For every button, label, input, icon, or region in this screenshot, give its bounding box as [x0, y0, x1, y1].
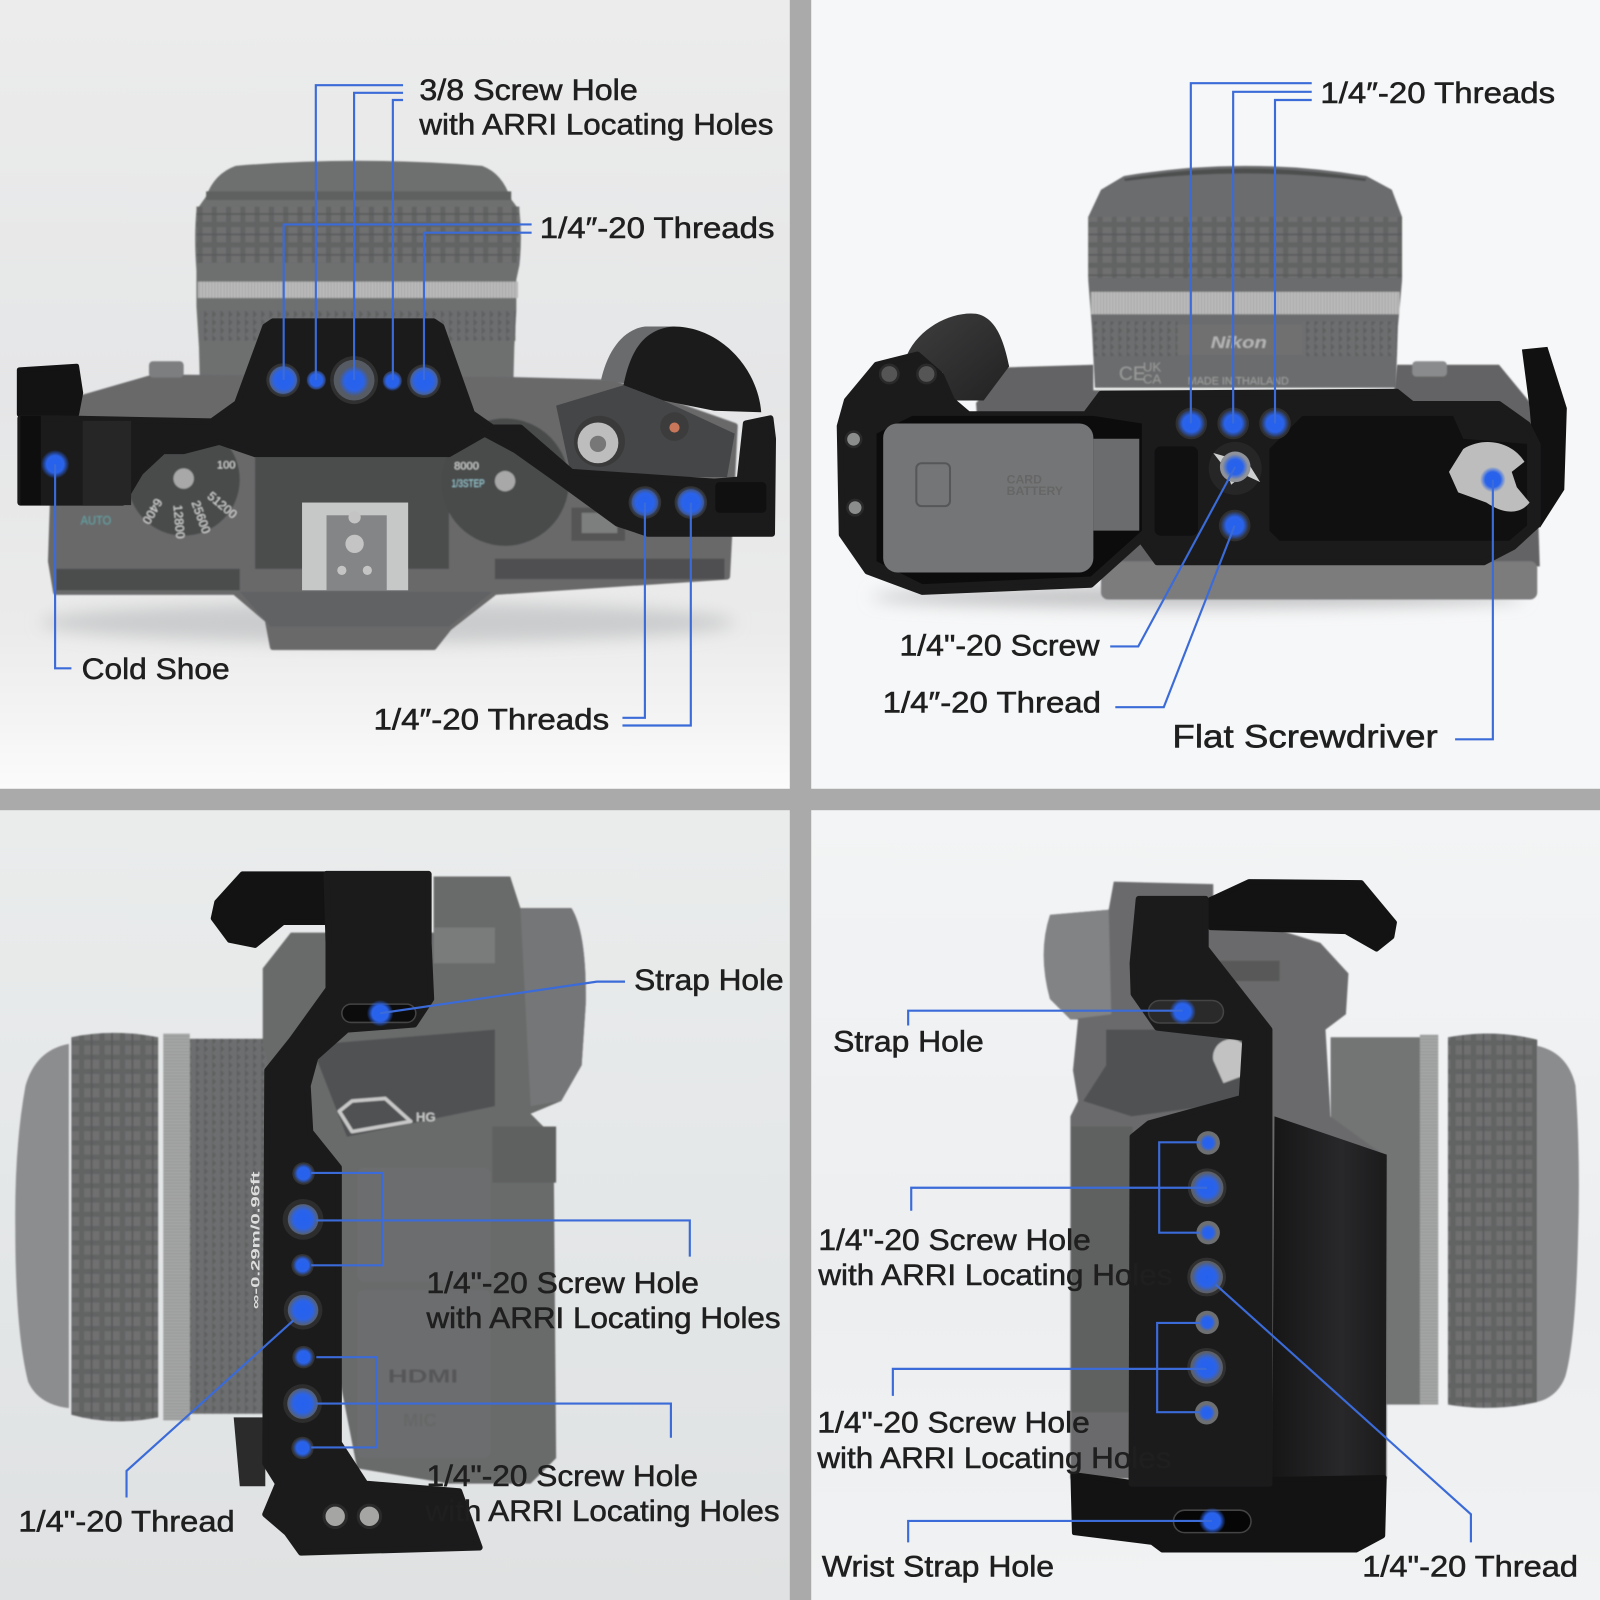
faded camera: lens: Nikon: [1211, 334, 1267, 352]
faded camera: body: 25600: [189, 499, 213, 536]
faded camera: body: 8000: [454, 460, 479, 472]
labels: Strap Hole: [833, 1026, 984, 1059]
cage: side plate: [1132, 899, 1269, 1484]
panel: top view: [0, 0, 790, 789]
cage: base: [1073, 1474, 1384, 1550]
labels: [816, 1026, 1578, 1584]
faded camera: body: 100: [217, 459, 236, 471]
cage: thumb rest: [213, 874, 327, 945]
labels: Cold Shoe: [82, 653, 230, 686]
camera shadow: [41, 602, 735, 643]
labels: 1/4"-20 Screw Hole: [818, 1224, 1091, 1257]
battery door: [883, 423, 1139, 572]
labels: Flat Screwdriver: [1172, 717, 1438, 754]
cage: base plate: [840, 355, 1538, 592]
labels: 1/4″-20 Thread: [883, 687, 1101, 720]
panel background: [0, 0, 790, 789]
faded camera: lens: [1088, 166, 1402, 388]
holes and markers: [1169, 998, 1227, 1534]
callout lines: [55, 85, 691, 726]
panel background: [0, 810, 790, 1600]
faded camera: body: [1044, 882, 1387, 1479]
faded camera: body: 51200: [205, 489, 240, 522]
faded camera: hot shoe: [302, 503, 408, 590]
faded camera: body: [263, 877, 586, 1484]
cage: hand grip: [907, 313, 1009, 401]
labels: 1/4"-20 Screw Hole: [427, 1460, 698, 1493]
faded camera: lens: [1331, 1033, 1579, 1408]
faded camera: lens: [15, 1033, 271, 1421]
cage: thumb rest: [1211, 882, 1394, 949]
labels: 1/4″-20 Threads: [1320, 77, 1555, 110]
labels: [82, 74, 774, 737]
callout lines: [893, 1011, 1471, 1542]
holes and markers: [1176, 408, 1506, 541]
cage: side plate: [265, 874, 480, 1553]
holes and markers: [283, 1000, 393, 1459]
labels: with ARRI Locating Holes: [816, 1442, 1171, 1475]
labels: 1/4"-20 Thread: [1362, 1551, 1578, 1584]
panel background: [811, 810, 1600, 1600]
labels: 1/4"-20 Screw: [899, 630, 1100, 663]
labels: 1/4"-20 Thread: [18, 1506, 235, 1539]
cage: top plate: [20, 321, 773, 534]
faded camera: body: [976, 361, 1540, 599]
callout lines: [1110, 83, 1493, 739]
holes and markers: [41, 356, 707, 519]
camera shadow: [871, 587, 1524, 607]
labels: 1/4"-20 Screw Hole: [427, 1267, 699, 1300]
strap holes: [1148, 1001, 1251, 1533]
faded camera: lens: CE: [1119, 363, 1146, 385]
screws: [846, 365, 936, 515]
faded camera: body: HDMI: [388, 1366, 458, 1387]
labels: with ARRI Locating Holes: [418, 109, 773, 142]
labels: Strap Hole: [634, 964, 784, 997]
lens bottom mount: [234, 1417, 265, 1486]
labels: 1/4″-20 Threads: [540, 212, 774, 245]
cage: hand grip: [1272, 1116, 1387, 1486]
cage: right shoe: [1522, 347, 1567, 528]
labels: 1/4"-20 Screw Hole: [817, 1407, 1090, 1440]
labels: 1/4″-20 Threads: [373, 704, 609, 737]
panel: bottom view: [811, 0, 1600, 789]
cage: grip and eyecup: [19, 327, 761, 477]
faded camera: body: [51, 361, 735, 647]
faded camera: body: HG: [416, 1109, 436, 1124]
base screws: [324, 1505, 381, 1528]
faded camera: body: MIC: [403, 1410, 437, 1431]
labels: 3/8 Screw Hole: [419, 74, 638, 107]
flat screwdriver: [1449, 442, 1530, 512]
panel: side view left: [0, 810, 790, 1600]
battery door: BATTERY: [1007, 484, 1063, 498]
labels: with ARRI Locating Holes: [424, 1495, 780, 1528]
labels: with ARRI Locating Holes: [425, 1302, 781, 1335]
labels: Wrist Strap Hole: [822, 1551, 1054, 1584]
labels: with ARRI Locating Holes: [817, 1259, 1172, 1292]
faded camera: body: AUTO: [81, 513, 111, 527]
cage: end block: [20, 416, 766, 513]
faded camera: lens: CA: [1143, 372, 1161, 387]
labels: [18, 964, 784, 1539]
tripod screw: [1209, 442, 1262, 495]
panel background: [811, 0, 1600, 789]
panel: side view right: [811, 810, 1600, 1600]
faded camera: lens: MADE IN THAILAND: [1188, 376, 1289, 388]
battery door: CARD: [1007, 473, 1042, 487]
callout lines: [127, 982, 690, 1497]
labels: [883, 77, 1555, 754]
scale text: ∞-0.29m/0.96ft: [250, 1171, 263, 1309]
cage: pockets: [877, 416, 1527, 584]
faded camera: body: 6400: [139, 496, 165, 527]
faded camera: lens: UK: [1143, 359, 1161, 374]
faded camera: body: 12800: [170, 504, 187, 539]
faded camera: body: 1/3STEP: [452, 478, 485, 490]
strap hole: [342, 1004, 416, 1022]
faded camera: lens: [195, 161, 521, 388]
